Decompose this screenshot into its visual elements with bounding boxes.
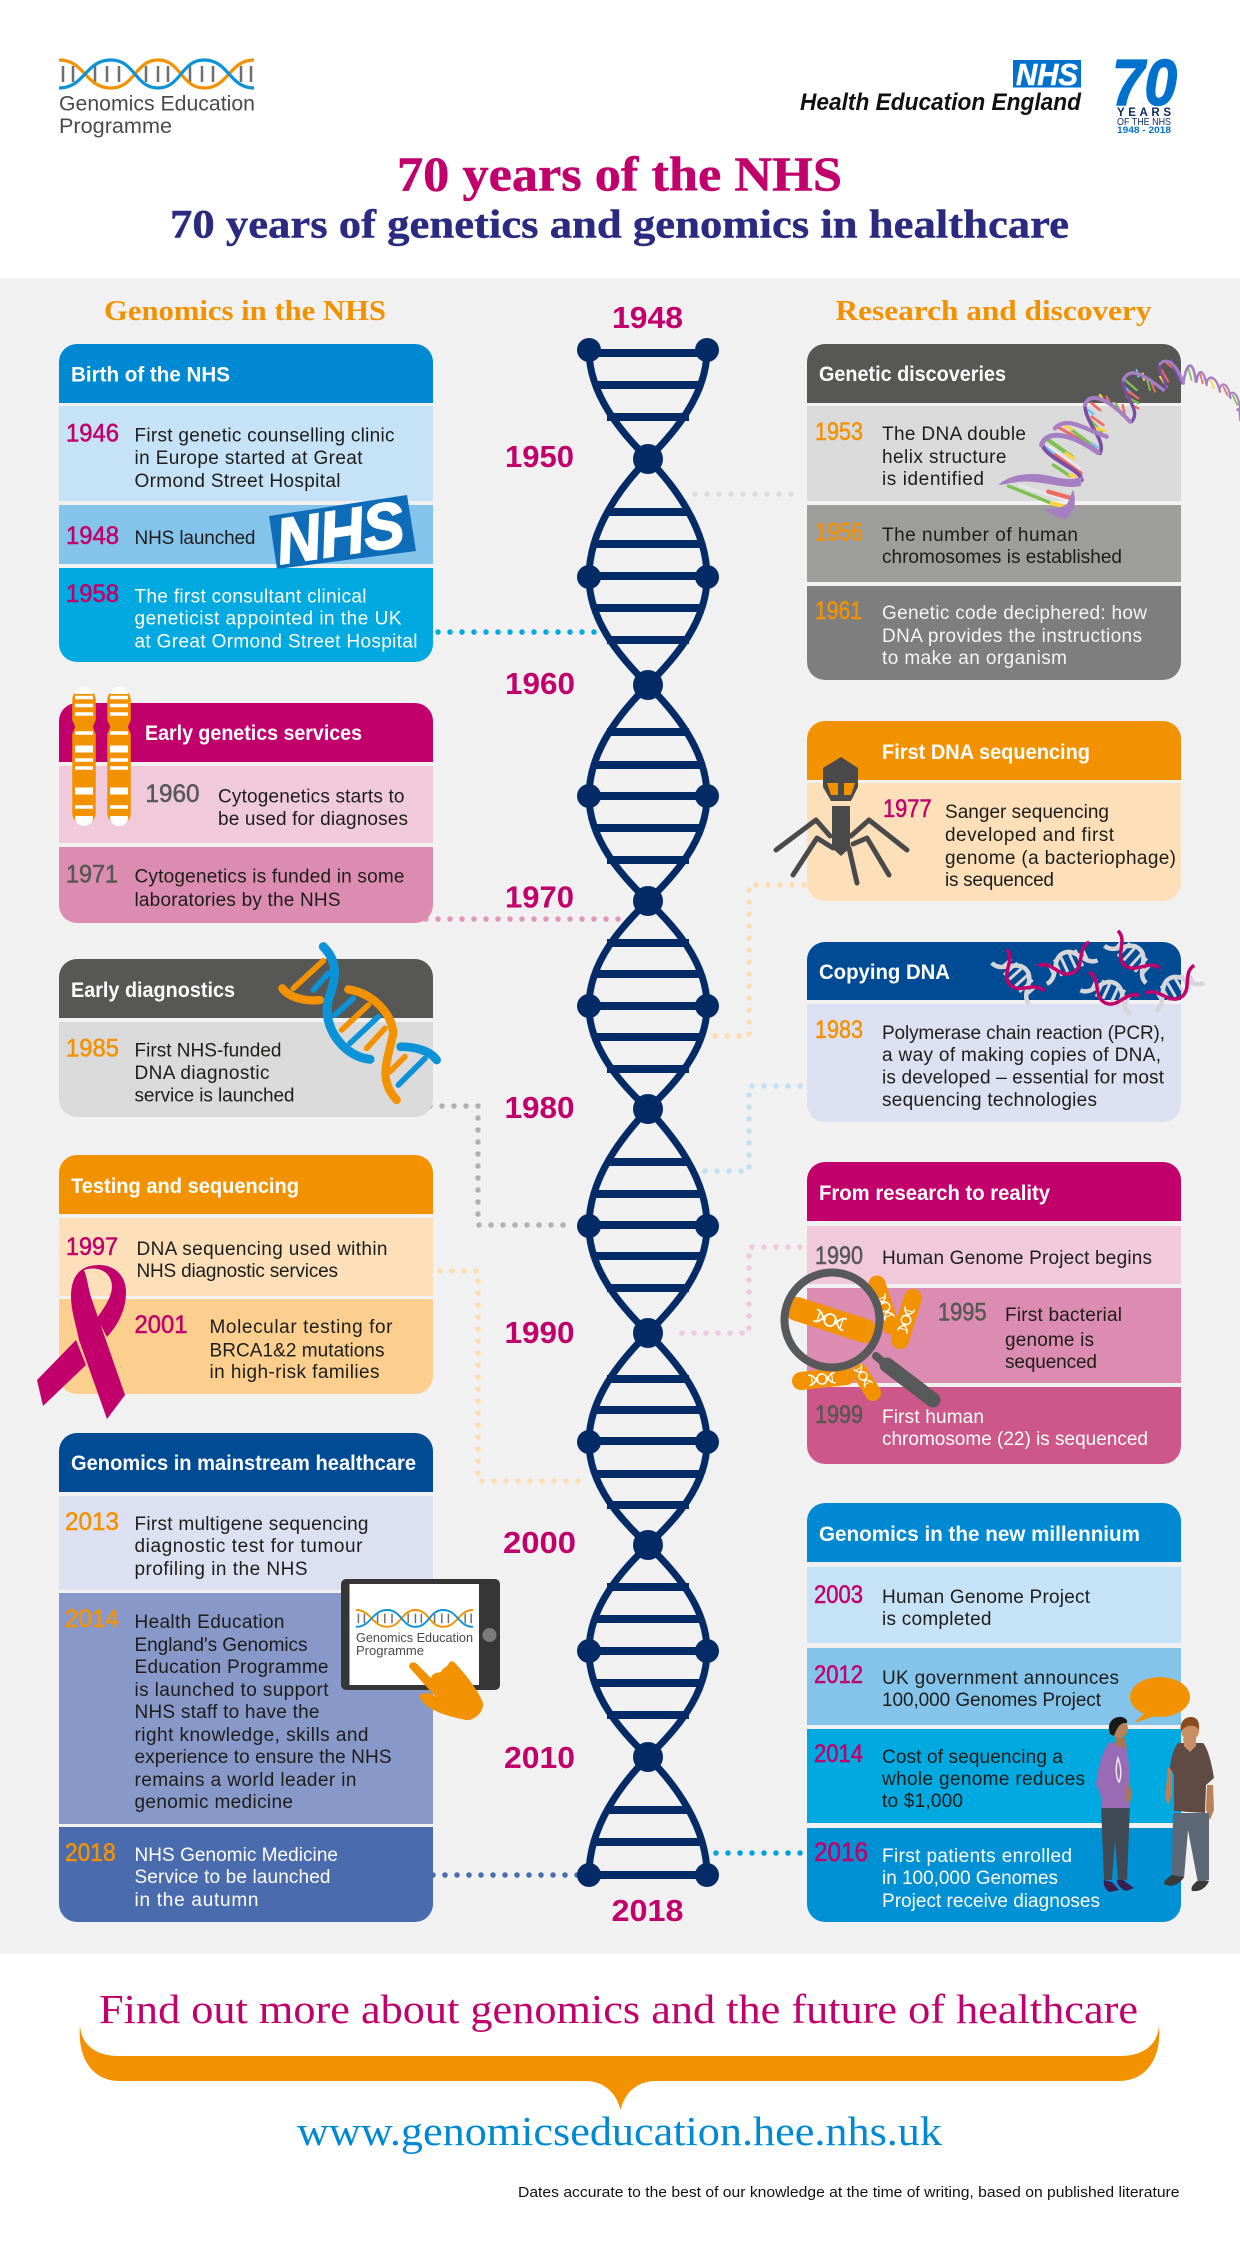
panel: Early genetics services: be used for diagnoses [218, 809, 408, 830]
panel: Early diagnostics: First NHS-funded [134, 1040, 282, 1062]
panel: Early genetics services: 1971 [66, 860, 118, 888]
panel: Genomics in the new millennium: First patients enrolled [882, 1846, 1072, 1867]
panel: Copying DNA [807, 942, 1181, 1122]
panel: Birth of the NHS: NHS launched [134, 528, 256, 549]
panel: Birth of the NHS: geneticist appointed in the UK [134, 608, 402, 630]
panel: Genomics in mainstream healthcare: 2014 [65, 1605, 119, 1633]
panel: Genomics in mainstream healthcare: remains a world leader in [134, 1770, 356, 1791]
panel: Early diagnostics: service is launched [134, 1086, 294, 1106]
panel: Genomics in mainstream healthcare: right knowledge, skills and [134, 1725, 368, 1746]
panel: From research to reality: From research to reality [819, 1182, 1050, 1205]
panel: Early genetics services: laboratories by the NHS [134, 890, 340, 911]
panel: Genomics in the new millennium [807, 1503, 1181, 1922]
panel: Genomics in the new millennium: 100,000 Genomes Project [882, 1690, 1102, 1711]
panel: Genetic discoveries: The DNA double [882, 424, 1026, 445]
panel: Birth of the NHS: 1948 [66, 522, 119, 550]
panel: Testing and sequencing: Testing and sequencing [71, 1175, 299, 1198]
timeline decade labels: 2010 [504, 1740, 575, 1775]
panel: From research to reality: Human Genome Project begins [882, 1248, 1152, 1269]
DNA timeline helix [577, 338, 719, 1887]
panel: Copying DNA: is developed – essential for most [882, 1068, 1165, 1088]
panel: Genomics in the new millennium: 2014 [814, 1740, 863, 1768]
panel: Birth of the NHS [59, 344, 433, 662]
logo: 70 years of the NHS: YEARS [1117, 107, 1171, 119]
panel: Genomics in mainstream healthcare: First multigene sequencing [134, 1514, 368, 1535]
panel: First DNA sequencing [807, 721, 1181, 901]
panel: Early diagnostics [59, 959, 433, 1117]
panel: Genomics in the new millennium: whole genome reduces [881, 1769, 1085, 1790]
panel: First DNA sequencing: is sequenced [945, 870, 1054, 891]
panel: From research to reality [807, 1162, 1181, 1464]
panel: Birth of the NHS: 1946 [66, 420, 119, 448]
panel: Genomics in mainstream healthcare: NHS staff to have the [134, 1702, 320, 1723]
panel: Genetic discoveries: 1961 [815, 597, 862, 625]
panel: From research to reality: First bacterial [1005, 1305, 1122, 1326]
panel: Copying DNA: Copying DNA [819, 961, 950, 984]
panel: Genomics in the new millennium: is completed [882, 1609, 992, 1630]
panel: Genetic discoveries: chromosomes is established [882, 547, 1122, 568]
panel: Genetic discoveries: Genetic discoveries [819, 363, 1006, 386]
panel: From research to reality: genome is [1005, 1330, 1094, 1351]
panel: Testing and sequencing: in high-risk families [210, 1362, 380, 1383]
panel: Genomics in the new millennium: 2012 [814, 1661, 863, 1689]
icon: NHS logo: NHS [271, 488, 409, 578]
panel: Genomics in mainstream healthcare: diagnostic test for tumour [134, 1536, 363, 1557]
panel: Genomics in mainstream healthcare: Genomics in mainstream healthcare [71, 1452, 416, 1475]
panel: Genetic discoveries: helix structure [882, 447, 1006, 468]
panel: Copying DNA: sequencing technologies [882, 1090, 1097, 1111]
panel: First DNA sequencing: 1977 [883, 795, 932, 823]
timeline decade labels: 1990 [504, 1315, 574, 1350]
panel: Genomics in mainstream healthcare: Education Programme [134, 1657, 328, 1678]
panel: First DNA sequencing: genome (a bacteriophage) [945, 848, 1176, 869]
panel: Early genetics services: Early genetics services [145, 722, 362, 745]
panel: From research to reality: 1990 [815, 1242, 863, 1270]
panel: Birth of the NHS: Ormond Street Hospital [134, 471, 340, 492]
panel: Testing and sequencing: DNA sequencing used within [136, 1239, 388, 1260]
panel: Genomics in mainstream healthcare: Health Education [134, 1612, 284, 1633]
panel: Genetic discoveries: is identified [882, 469, 984, 490]
panel: Genomics in mainstream healthcare: NHS Genomic Medicine [134, 1845, 338, 1866]
panel: From research to reality: First human [882, 1407, 984, 1428]
icon: tablet with hand: Genomics Education [356, 1630, 473, 1645]
panel: Testing and sequencing: 1997 [66, 1233, 118, 1261]
panel: Birth of the NHS: Birth of the NHS [71, 364, 230, 386]
timeline decade labels: 2018 [612, 1893, 684, 1928]
panel: Genetic discoveries: Genetic code deciphered: how [882, 603, 1147, 624]
panel: Genetic discoveries: DNA provides the instructions [882, 626, 1142, 647]
panel: Genomics in the new millennium: in 100,000 Genomes [882, 1868, 1058, 1889]
icon: magnifying glass with bacteria [784, 1272, 933, 1400]
panel: First DNA sequencing: First DNA sequencing [882, 741, 1090, 764]
illustration: clinician and patient [1096, 1717, 1214, 1892]
icon: tablet with hand [341, 1579, 500, 1720]
icon: ribbon [37, 1265, 126, 1419]
panel: Birth of the NHS: at Great Ormond Street Hospital [134, 632, 418, 652]
panel: Copying DNA: Polymerase chain reaction (PCR), [882, 1023, 1165, 1044]
icon: chromosomes [73, 687, 130, 826]
icon: speech bubble [1130, 1677, 1190, 1723]
timeline decade labels: 1960 [505, 666, 575, 701]
panel: Birth of the NHS: First genetic counselling clinic [134, 426, 394, 446]
panel: Genomics in mainstream healthcare: England's Genomics [134, 1635, 308, 1656]
icon: coloured DNA helix [998, 360, 1240, 519]
footer: website URL: www.genomicseducation.hee.nhs.uk [297, 2108, 943, 2154]
panel: Testing and sequencing: BRCA1&2 mutations [210, 1340, 384, 1362]
panel: Birth of the NHS: in Europe started at Great [134, 448, 363, 469]
panel: Copying DNA: a way of making copies of DNA, [882, 1045, 1161, 1066]
dotted connectors [426, 494, 806, 1875]
footnote: Dates accurate to the best of our knowledge at the time of writing, based on published literature [518, 2184, 1180, 2201]
footer: call to action: Find out more about genomics and the future of healthcare [99, 1986, 1138, 2032]
panel: Early genetics services: Cytogenetics starts to [218, 786, 404, 808]
icon: small DNA copies [991, 930, 1205, 1015]
panel: Early genetics services: Cytogenetics is funded in some [134, 866, 404, 888]
subtitle: 70 years of genetics and genomics in healthcare [170, 202, 1069, 246]
panel: From research to reality: chromosome (22) is sequenced [882, 1429, 1148, 1450]
panel: Genomics in the new millennium: UK government announces [882, 1668, 1119, 1689]
grey timeline panel [0, 278, 1240, 1954]
panel: From research to reality: 1995 [938, 1298, 987, 1326]
panel: Testing and sequencing: 2001 [134, 1311, 188, 1339]
panel: Genomics in the new millennium: 2003 [814, 1581, 863, 1609]
panel: Genetic discoveries: 1953 [815, 418, 863, 446]
icon: tablet with hand: Programme [356, 1643, 424, 1658]
panel: Genomics in mainstream healthcare: profiling in the NHS [134, 1559, 308, 1580]
panel: Testing and sequencing: NHS diagnostic services [136, 1261, 338, 1282]
panel: Genetic discoveries: 1956 [815, 518, 863, 546]
panel: From research to reality: 1999 [815, 1401, 863, 1429]
icon: bacteriophage [776, 757, 907, 883]
panel: Copying DNA: 1983 [815, 1016, 863, 1044]
panel: Early genetics services: 1960 [146, 780, 200, 808]
timeline decade labels: 1950 [505, 439, 574, 474]
panel: Genomics in the new millennium: Genomics in the new millennium [819, 1523, 1140, 1546]
logo: Genomics Education Programme: Programme [59, 115, 172, 138]
timeline decade labels: 1948 [612, 300, 683, 335]
panel: Genomics in the new millennium: Project receive diagnoses [882, 1891, 1100, 1912]
panel: Early diagnostics: DNA diagnostic [134, 1063, 270, 1084]
panel: Genomics in the new millennium: Human Genome Project [882, 1587, 1091, 1608]
logo: 70 years of the NHS: OF THE NHS [1117, 117, 1171, 128]
logo: 70 years of the NHS: 70 [1112, 46, 1177, 119]
panel: Genomics in mainstream healthcare: 2018 [65, 1839, 116, 1867]
panel: Birth of the NHS: 1958 [66, 580, 119, 608]
timeline decade labels: 1980 [504, 1090, 574, 1125]
logo: Genomics Education Programme: Genomics Education [59, 92, 255, 116]
panel: Genomics in mainstream healthcare: genomic medicine [134, 1792, 293, 1813]
panel: Genomics in mainstream healthcare: Service to be launched [134, 1867, 330, 1888]
timeline decade labels [503, 300, 684, 1928]
panel: First DNA sequencing: developed and first [945, 825, 1115, 846]
icon: DNA double helix blue and orange [282, 947, 437, 1100]
panel: Genetic discoveries: to make an organism [882, 648, 1067, 669]
panel: Genetic discoveries [807, 344, 1181, 680]
logo: 70 years of the NHS: 1948 - 2018 [1117, 125, 1171, 136]
panel: Genomics in the new millennium: 2016 [814, 1837, 868, 1867]
panel: Birth of the NHS: The first consultant clinical [134, 586, 366, 608]
logo: NHS Health Education England: NHS [1016, 57, 1078, 92]
logo: NHS Health Education England: Health Education England [800, 89, 1082, 116]
panel: Genomics in mainstream healthcare: in the autumn [134, 1890, 258, 1911]
panel: Testing and sequencing: Molecular testing for [210, 1317, 393, 1338]
panel: Genomics in mainstream healthcare: is launched to support [134, 1680, 329, 1701]
panel: Genomics in mainstream healthcare: 2013 [65, 1508, 119, 1536]
timeline decade labels: 1970 [505, 880, 574, 914]
panel: Genomics in the new millennium: to $1,000 [882, 1791, 963, 1812]
heading: Genomics in the NHS: Genomics in the NHS [104, 295, 386, 327]
panel: Early diagnostics: Early diagnostics [71, 979, 235, 1002]
logo: NHS Health Education England [800, 57, 1082, 116]
panel: First DNA sequencing: Sanger sequencing [945, 802, 1109, 823]
panel: Testing and sequencing [59, 1155, 433, 1394]
panel: Genomics in mainstream healthcare [59, 1433, 433, 1922]
panel: Early genetics services [59, 703, 433, 923]
title: 70 years of the NHS [397, 146, 842, 202]
bracket [80, 2025, 1159, 2110]
panel: Genomics in the new millennium: Cost of sequencing a [882, 1747, 1063, 1768]
panel: Early diagnostics: 1985 [66, 1034, 119, 1062]
panel: Genomics in mainstream healthcare: experience to ensure the NHS [134, 1747, 392, 1768]
timeline decade labels: 2000 [503, 1525, 576, 1560]
logo: Genomics Education Programme [59, 60, 255, 138]
panel: Genetic discoveries: The number of human [882, 525, 1078, 546]
heading: Research and discovery: Research and discovery [836, 295, 1152, 327]
panel: From research to reality: sequenced [1005, 1352, 1097, 1373]
